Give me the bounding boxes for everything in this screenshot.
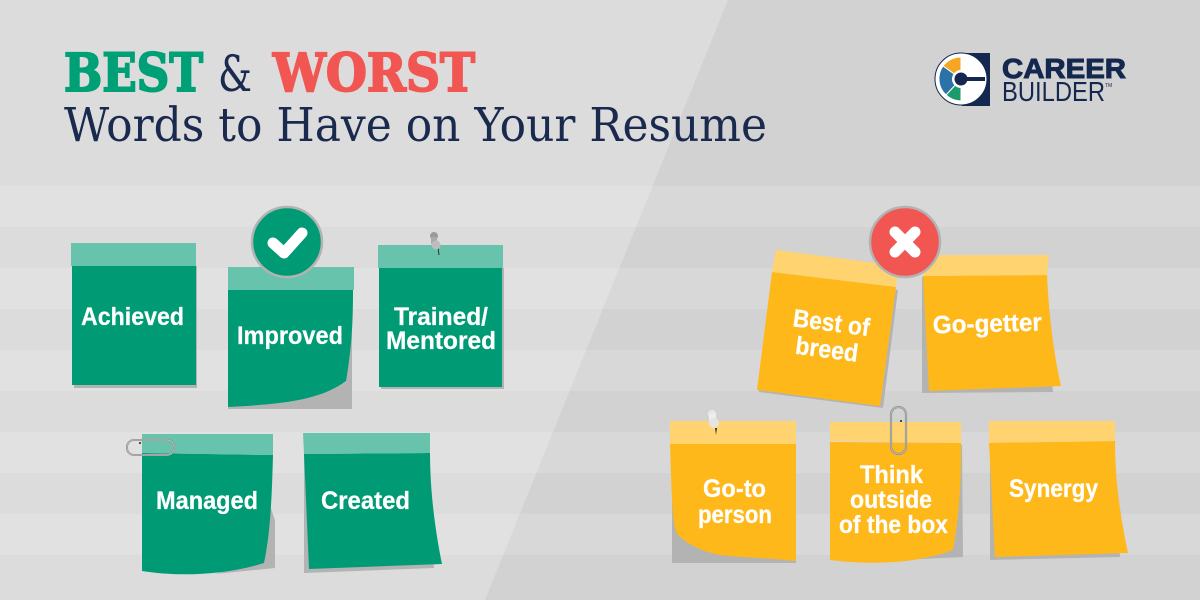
background	[486, 0, 1200, 600]
note: Trained/Mentored	[378, 245, 504, 389]
note: Go-to person	[670, 421, 796, 563]
note: Improved	[228, 267, 354, 409]
icon: paper clip	[127, 440, 174, 455]
logo: CareerBuilder	[935, 53, 1126, 107]
note: Created: Created	[321, 487, 410, 515]
title	[64, 43, 767, 153]
title: &	[218, 45, 252, 103]
note: Managed	[142, 434, 275, 574]
note: Go-getter: Go-getter	[932, 309, 1042, 339]
title: Words to Have on Your Resume	[64, 98, 767, 153]
title: WORST	[272, 43, 475, 104]
logo: CareerBuilder: TM	[1105, 83, 1112, 89]
note: Think outside of the box: Think	[860, 461, 923, 489]
note: Managed: Managed	[156, 487, 258, 515]
icon: push pin	[708, 410, 719, 435]
title: BEST	[64, 43, 203, 104]
note: Improved: Improved	[237, 322, 343, 350]
note: Go-getter	[922, 255, 1061, 393]
note: Trained/Mentored: Mentored	[386, 327, 496, 355]
note: Synergy	[989, 421, 1128, 560]
note: Created	[303, 433, 442, 573]
icon: push pin	[430, 232, 440, 255]
note: Think outside of the box	[830, 422, 963, 563]
note: Best of breed: breed	[794, 332, 860, 368]
note: Synergy: Synergy	[1009, 475, 1098, 503]
note: Go-to person: Go-to	[703, 475, 766, 503]
note: Best of breed	[757, 250, 899, 408]
note: Achieved	[71, 243, 197, 388]
badge: cross mark	[870, 207, 940, 277]
logo: CareerBuilder: CAREER	[1002, 53, 1126, 84]
note: Think outside of the box: of the box	[839, 511, 948, 539]
logo: CareerBuilder: BUILDER	[1002, 76, 1105, 107]
note: Go-to person: person	[698, 501, 772, 529]
note: Achieved: Achieved	[81, 303, 184, 331]
badge: check mark	[252, 207, 322, 277]
icon: paper clip	[891, 407, 906, 454]
note: Trained/Mentored: Trained/	[394, 303, 488, 331]
note: Best of breed: Best of	[791, 304, 872, 342]
note: Think outside of the box: outside	[850, 486, 932, 514]
